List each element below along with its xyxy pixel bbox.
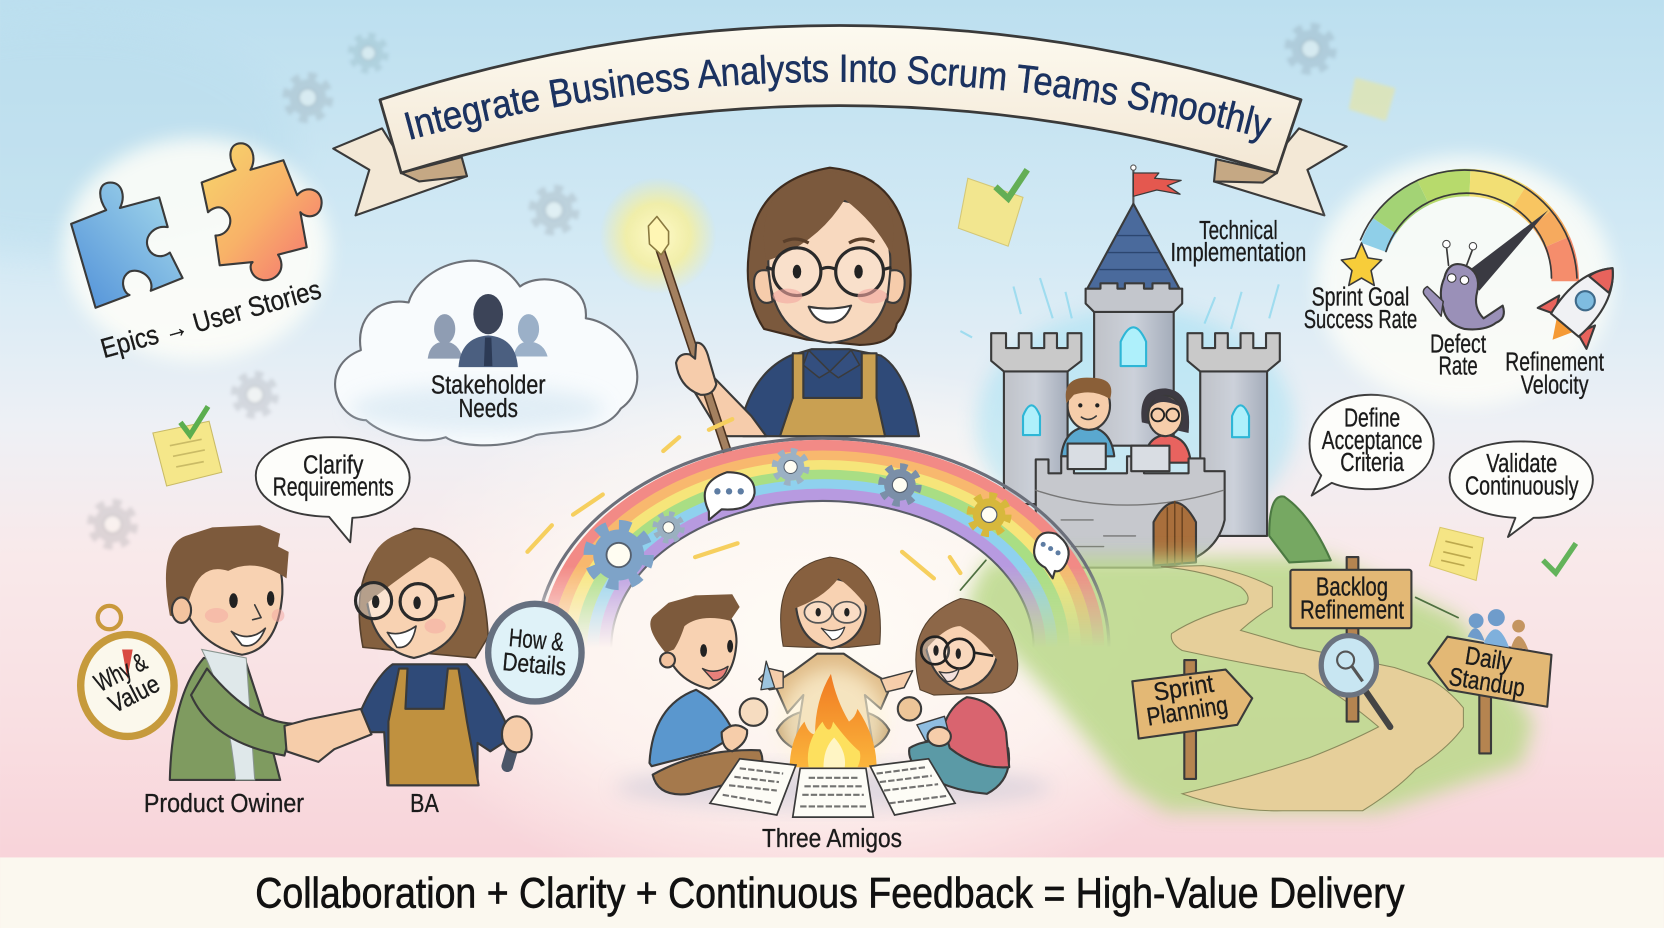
footer band (0, 857, 1664, 928)
label: sprint goal success rate (1304, 284, 1417, 334)
sign: sprint planning: Sprint (1152, 670, 1216, 707)
speech bubble: clarify requirements: Requirements (273, 474, 394, 502)
speech bubble: define acceptance criteria: Acceptance (1322, 427, 1423, 455)
icon: defect bug (1423, 240, 1504, 329)
banner right tail (1214, 128, 1347, 215)
bush (1269, 496, 1331, 562)
glasses and eyes (766, 239, 891, 303)
body (743, 349, 919, 436)
label: three amigos: Three Amigos (762, 825, 902, 853)
door (1154, 501, 1196, 566)
amigo: centre woman (759, 557, 913, 759)
right tower (1187, 333, 1280, 536)
label: defect rate (1430, 330, 1486, 381)
speech bubble: define acceptance criteria: Define (1344, 405, 1400, 433)
amigo: right woman (898, 599, 1018, 794)
winding road (1161, 566, 1463, 811)
wand tip (648, 216, 669, 255)
three amigos group (616, 557, 1051, 853)
icon: magnifier on post (1321, 636, 1390, 727)
top slate gear (775, 451, 806, 483)
spark strokes (527, 419, 960, 578)
centre tower (1086, 204, 1182, 446)
product owner figure (81, 525, 305, 818)
gauge arc (1374, 183, 1565, 281)
label: sprint goal success rate: Success Rate (1304, 306, 1417, 334)
fringe (365, 531, 472, 615)
title banner (332, 24, 1348, 216)
hand (502, 716, 532, 752)
face (768, 200, 890, 343)
panel: metrics gauge (1304, 156, 1637, 406)
smile (809, 306, 851, 323)
left tower (991, 333, 1081, 504)
speech bubble: define acceptance criteria: Criteria (1340, 449, 1405, 477)
technical implementation label (1171, 217, 1306, 267)
compass (81, 606, 174, 736)
castle woman (1141, 388, 1191, 463)
castle (960, 164, 1295, 568)
title text: Integrate Business Analysts Into Scrum Teams Smoothly (404, 54, 1272, 144)
torso (170, 658, 280, 780)
sign: backlog refinement: Refinement (1300, 597, 1404, 625)
hair back (359, 528, 488, 658)
banner ribbon (380, 25, 1301, 173)
large blue gear (590, 526, 648, 584)
label: stakeholder needs: Needs (458, 395, 518, 423)
amigo: boy (649, 594, 767, 794)
ears (754, 270, 905, 303)
shirt (202, 649, 255, 780)
panel: stakeholder needs cloud (335, 261, 637, 445)
speech bubble: define acceptance criteria (1310, 395, 1434, 496)
face details (205, 591, 284, 646)
glasses and eyes (356, 583, 454, 647)
staff (660, 249, 732, 467)
magnifier: how and details (488, 604, 582, 766)
faded sticky note top right (1349, 77, 1395, 121)
fringe (764, 172, 893, 261)
label: stakeholder needs (431, 372, 546, 423)
sign: daily standup: Daily (1463, 642, 1514, 677)
sticky note with check, left (153, 406, 222, 486)
sign: sprint planning: Planning (1145, 691, 1230, 732)
sleeve (191, 669, 293, 756)
glow rays (960, 278, 1279, 337)
technical implementation label: Technical (1199, 217, 1278, 245)
label: refinement velocity (1505, 348, 1604, 400)
label: refinement velocity: Refinement (1505, 348, 1604, 376)
gears and chat bubbles on rainbow (527, 419, 1069, 584)
icon: star (1341, 243, 1382, 285)
sign: daily standup (1428, 609, 1551, 753)
label: BA: BA (410, 790, 439, 818)
label: defect rate: Defect (1430, 330, 1486, 358)
head (175, 531, 282, 655)
torso (352, 664, 512, 785)
label: stakeholder needs: Stakeholder (431, 372, 546, 400)
label: defect rate: Rate (1438, 353, 1478, 381)
icon: stakeholder group (428, 294, 548, 367)
business analyst figure (284, 528, 582, 818)
hand (676, 343, 716, 395)
technical implementation label: Implementation (1171, 239, 1306, 267)
icon: rocket (1528, 248, 1637, 360)
apron (388, 669, 479, 785)
centre gear (882, 467, 918, 503)
sign: backlog refinement (1290, 557, 1411, 727)
castle man (1061, 378, 1114, 456)
label: epics to user stories: Epics → User Stories (97, 273, 324, 364)
speech bubble: validate continuously: Validate (1486, 450, 1557, 478)
yellow gear (970, 496, 1008, 533)
compass: Value (104, 670, 164, 719)
panel: epics to user stories (64, 138, 329, 364)
rainbow bridge (536, 438, 1109, 647)
label: refinement velocity: Velocity (1521, 372, 1589, 400)
speech bubble: validate continuously (1450, 441, 1593, 537)
banner left tail (333, 128, 467, 215)
keep wall with battlements (1036, 444, 1225, 568)
central business analyst with wand (600, 168, 919, 467)
icon: orange puzzle piece (202, 143, 322, 280)
gauge needle (1464, 210, 1548, 291)
sign: sprint planning (1132, 660, 1252, 779)
label: sprint goal success rate: Sprint Goal (1312, 284, 1409, 312)
label: product owner: Product Owiner (144, 790, 305, 818)
hair back (748, 168, 911, 345)
icon: blue puzzle piece (71, 183, 183, 308)
signposts (1132, 557, 1551, 779)
collar (803, 350, 860, 378)
check mark right (1543, 543, 1576, 573)
chat bubble left (705, 472, 755, 520)
sticky note right (1429, 527, 1484, 580)
glow: wand light (600, 177, 716, 294)
hair (166, 525, 289, 621)
icon: people (1468, 609, 1528, 649)
sticky note with check, centre (958, 170, 1027, 246)
faded background gears (92, 27, 1332, 545)
tagline: Collaboration + Clarity + Continuous Feedback = High-Value Delivery (255, 869, 1405, 916)
compass: Why & (90, 648, 152, 698)
magnifier: how and details: Details (501, 648, 567, 681)
campfire (780, 669, 886, 775)
speech bubble: clarify requirements: Clarify (303, 451, 364, 479)
apron (780, 353, 885, 436)
small slate gear (655, 514, 682, 541)
forearm (690, 377, 766, 436)
ground shadow (616, 766, 1051, 809)
magnifier: how and details: How & (508, 624, 565, 657)
face (366, 543, 465, 658)
speech bubble: validate continuously: Continuously (1465, 473, 1579, 501)
ear (172, 597, 191, 623)
sign: daily standup: Standup (1447, 663, 1527, 703)
handshake (284, 709, 371, 762)
flag (1131, 164, 1181, 204)
chat bubble right (1034, 533, 1069, 578)
speech bubble: clarify requirements (256, 437, 410, 542)
hill and road (960, 496, 1533, 812)
notes (710, 759, 955, 817)
sign: backlog refinement: Backlog (1316, 573, 1388, 601)
